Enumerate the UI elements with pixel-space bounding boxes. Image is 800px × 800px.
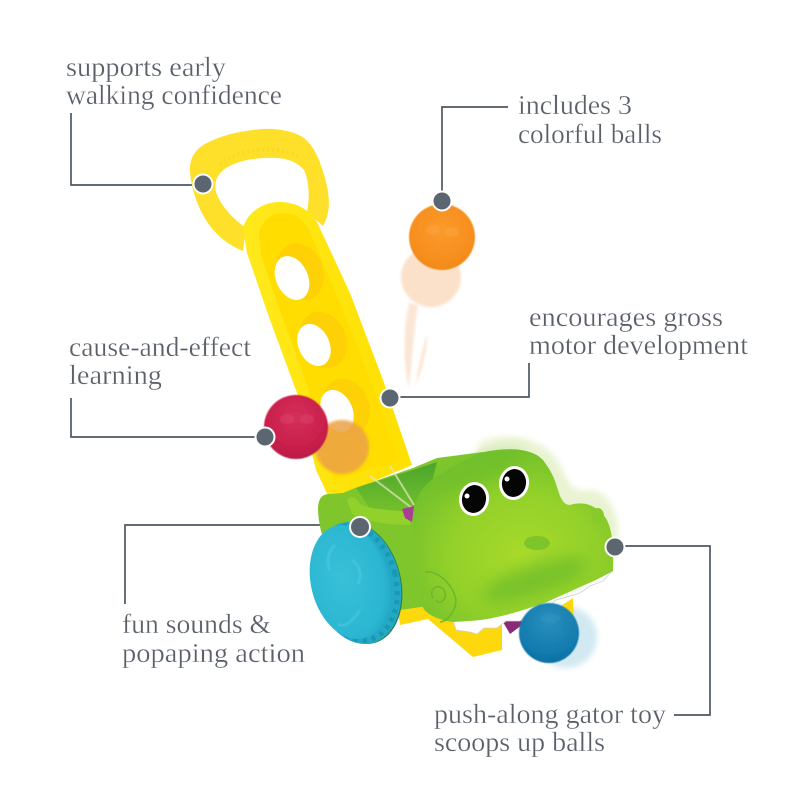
label: includes 3 colorful balls: colorful balls — [518, 119, 662, 149]
hole 2 — [291, 319, 337, 371]
body front lip — [347, 497, 412, 525]
green glow — [470, 437, 618, 560]
gator body — [318, 452, 483, 610]
yellow base — [396, 600, 502, 657]
label: supports early walking confidence: walking confidence — [66, 80, 282, 110]
callout marker dots — [194, 174, 624, 556]
orange ball — [409, 204, 475, 270]
label: fun sounds & popaping action — [122, 609, 306, 668]
blue ball glow — [535, 606, 597, 668]
label: cause-and-effect learning: cause-and-effect — [69, 332, 252, 362]
ball trail: orange — [404, 303, 427, 388]
callout leader lines — [71, 107, 710, 715]
faded orange ball in front of board — [315, 420, 369, 474]
cheek swirl — [425, 572, 456, 622]
label: includes 3 colorful balls — [518, 90, 662, 149]
hole 1 — [268, 250, 316, 306]
label: cause-and-effect learning — [69, 332, 252, 390]
eye right — [496, 464, 532, 502]
blue wheel — [298, 512, 415, 654]
nostril — [524, 536, 550, 550]
hole recesses — [268, 237, 332, 307]
label: supports early walking confidence — [66, 52, 282, 110]
hole 3 — [314, 385, 360, 437]
toy illustration: push-along gator — [190, 129, 618, 668]
label: push-along gator toy scoops up balls — [434, 699, 667, 757]
body trough — [356, 462, 437, 520]
label: cause-and-effect learning: learning — [69, 360, 162, 390]
label: encourages gross motor development — [529, 302, 749, 360]
ball motion streaks — [370, 466, 414, 508]
blue ball — [519, 603, 579, 663]
red ball — [264, 395, 328, 459]
faded orange ball — [401, 247, 461, 307]
label: fun sounds & popaping action: fun sounds & — [122, 609, 271, 639]
label: push-along gator toy scoops up balls: push-along gator toy — [434, 699, 667, 729]
eye left — [456, 480, 492, 518]
label: encourages gross motor development: motor development — [529, 330, 749, 360]
label: encourages gross motor development: encourages gross — [529, 302, 723, 332]
handle — [190, 129, 329, 251]
teeth — [452, 560, 613, 634]
purple tongue — [503, 612, 522, 634]
label: supports early walking confidence: supports early — [66, 52, 227, 82]
purple inside — [402, 506, 414, 522]
label: push-along gator toy scoops up balls: scoops up balls — [434, 727, 605, 757]
head shading — [478, 549, 592, 611]
label: fun sounds & popaping action: popaping action — [122, 638, 306, 668]
label: includes 3 colorful balls: includes 3 — [518, 90, 632, 120]
yellow push board — [243, 202, 412, 500]
gator head — [412, 449, 613, 622]
